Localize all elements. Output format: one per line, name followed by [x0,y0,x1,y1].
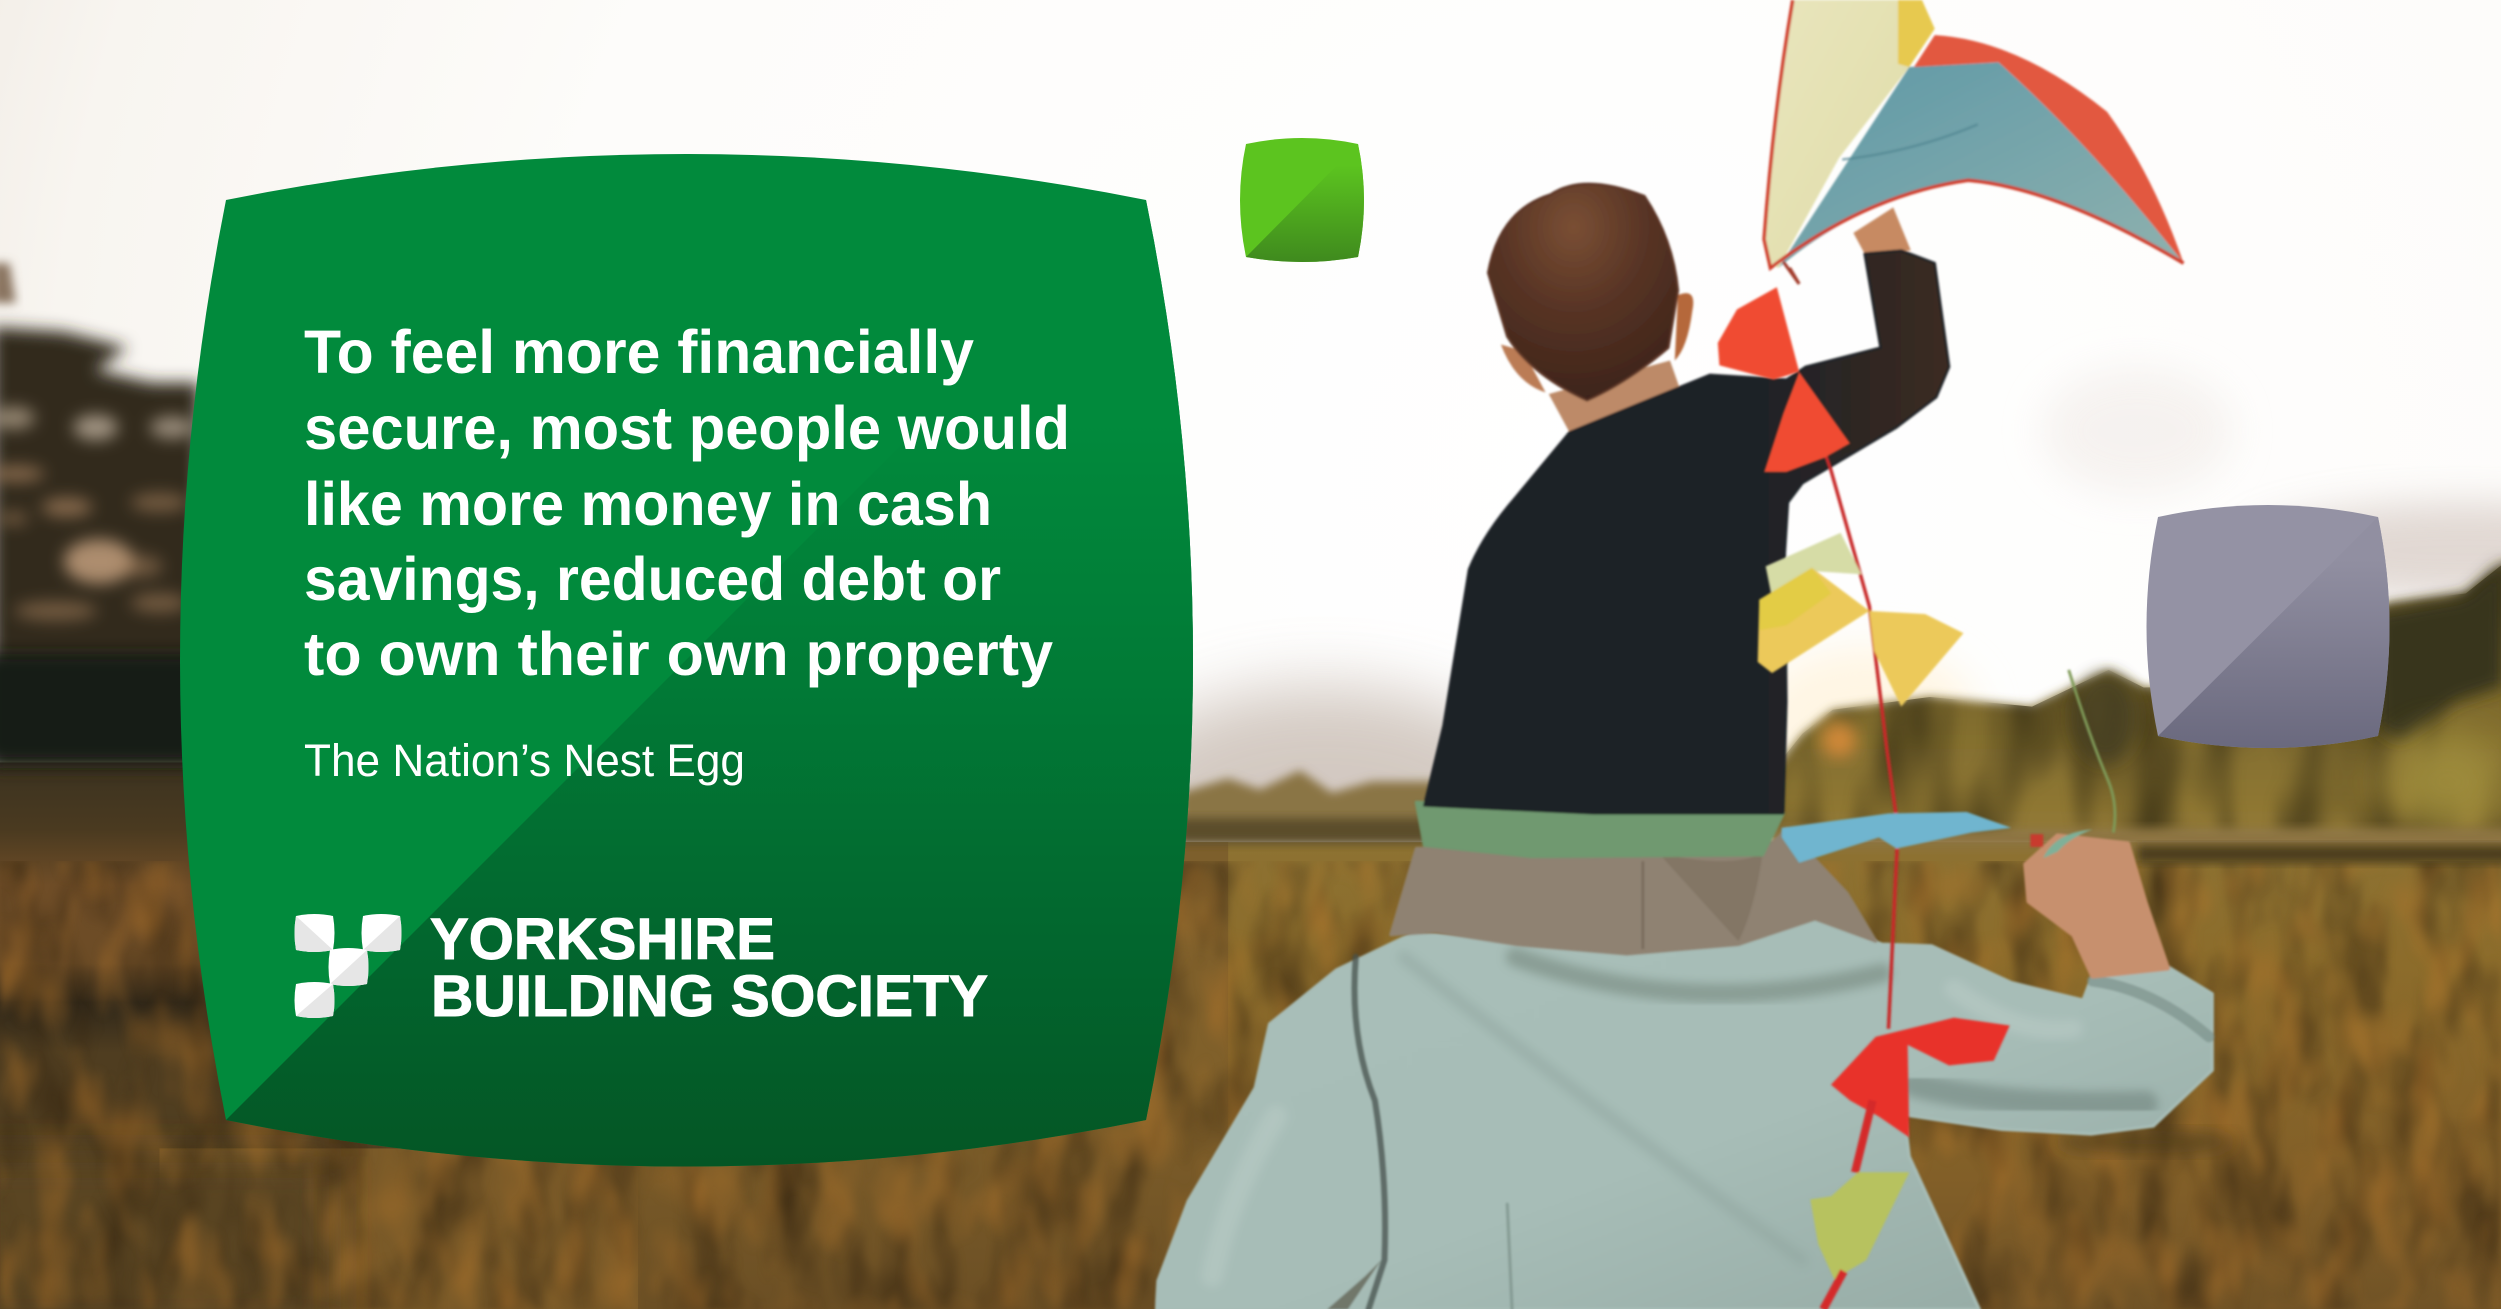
neck [1549,360,1680,432]
yellow bow [1758,568,1963,707]
decorative grey square [2146,505,2390,748]
quote text: To feel more financially [304,318,974,386]
field texture dark [0,861,2501,1309]
kite reel [2043,829,2093,858]
blue ribbon [1782,812,2011,863]
logo: Yorkshire Building Society [294,907,988,1029]
kite yellow strip [1898,0,1935,67]
kite cream sail [1764,0,1909,268]
trousers [1391,829,1876,954]
kite red edges [1764,0,2184,268]
field [0,762,2501,1309]
red bow lower [1831,1018,2010,1137]
kite blue sail [1778,62,2184,268]
father's hand [2026,836,2168,976]
quote text: secure, most people would [304,394,1070,462]
distant tree line [1177,550,2501,863]
card diagonal shade [226,200,1193,1166]
child [1391,184,1949,954]
logo wordmark: BUILDING SOCIETY [431,964,988,1029]
quote text: savings, reduced debt or [304,545,1001,613]
red bow top [1718,287,1850,472]
quote text [304,318,1070,688]
father [1156,670,2212,1309]
pale green ribbon [1766,533,1861,606]
head [1488,184,1678,400]
logo wordmark: YORKSHIRE [430,907,775,972]
ears [1675,293,1693,360]
sweater [1424,250,1949,813]
kite line [2069,670,2115,833]
source caption: The Nation’s Nest Egg [304,735,745,786]
quote text: like more money in cash [304,470,992,538]
shirt folds [1212,957,2209,1309]
tail string [1799,380,1898,1029]
kite red sail [1914,35,2184,263]
field texture light [0,861,2501,1309]
panel: green quote card [180,154,1193,1166]
card background [180,154,1193,1166]
left trees [0,263,207,769]
top hem [1416,802,1783,857]
kite tail with ribbons [1718,287,2011,1309]
logo mark [294,914,402,1018]
sky [0,0,2501,949]
hand raised [1853,207,1911,254]
decorative green square [1240,138,1364,262]
logo wordmark [430,907,988,1029]
quote text: to own their own property [304,620,1053,688]
kite [1764,0,2184,284]
father's shirt [1156,919,2212,1309]
green ribbon lower [1810,1172,1909,1279]
